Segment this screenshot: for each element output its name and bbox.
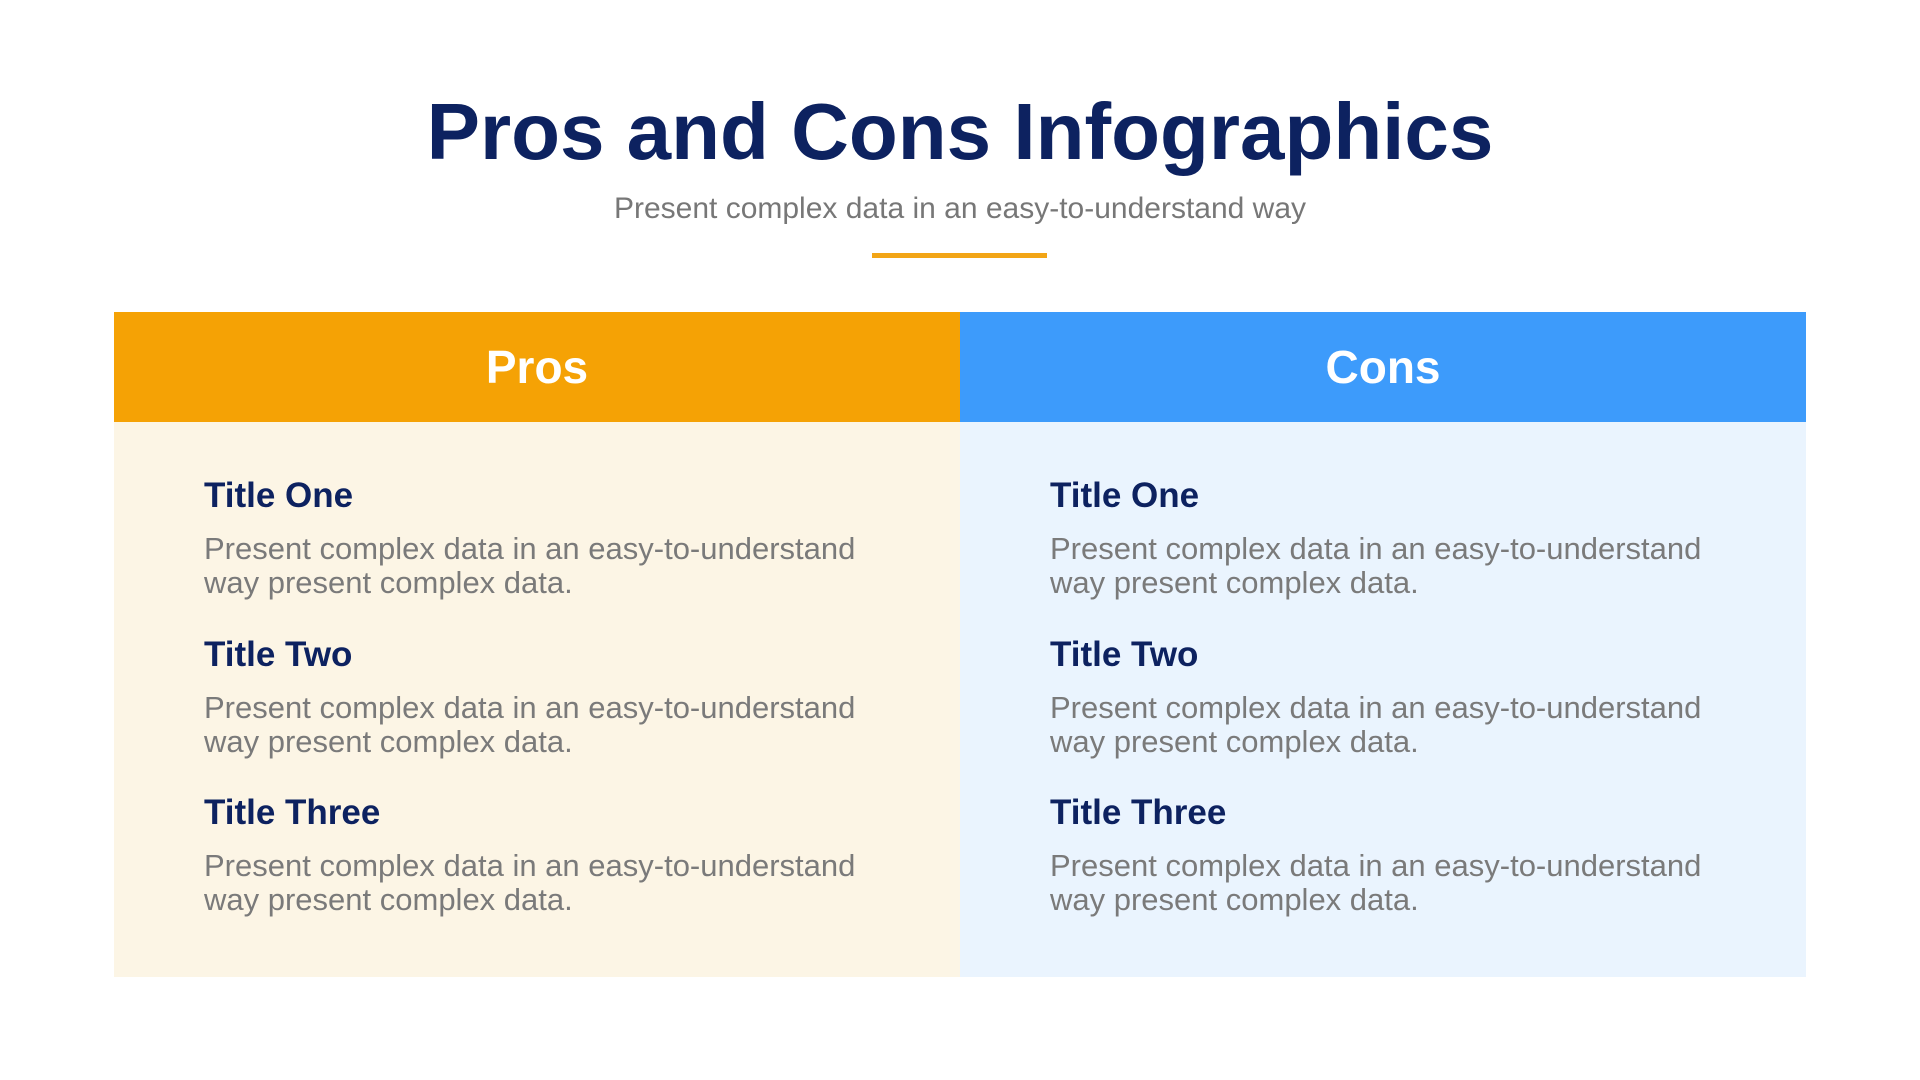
panel: cons — [960, 312, 1806, 977]
pros item two: Present complex data in an easy-to-understand — [204, 690, 855, 725]
pros item one: Title One — [204, 476, 353, 515]
pros item three: way present complex data. — [204, 882, 573, 917]
cons item three: way present complex data. — [1050, 882, 1419, 917]
pros item three — [204, 793, 855, 917]
title: Pros and Cons Infographics — [427, 87, 1493, 176]
panel: pros — [114, 312, 960, 977]
orange underline — [872, 253, 1047, 258]
cons item two: Title Two — [1050, 635, 1198, 674]
pros item two — [204, 635, 855, 759]
cons item two: Present complex data in an easy-to-understand — [1050, 690, 1701, 725]
pros item one: Present complex data in an easy-to-understand — [204, 531, 855, 566]
pros item one — [204, 476, 855, 600]
pros header — [114, 312, 960, 422]
cons item one — [1050, 476, 1701, 600]
cons header: Cons — [1326, 341, 1440, 393]
cons item three — [1050, 793, 1701, 917]
pros item two: way present complex data. — [204, 724, 573, 759]
pros item one: way present complex data. — [204, 565, 573, 600]
cons item three: Title Three — [1050, 793, 1226, 832]
cons item three: Present complex data in an easy-to-understand — [1050, 848, 1701, 883]
cons item one: way present complex data. — [1050, 565, 1419, 600]
subtitle: Present complex data in an easy-to-understand way — [614, 192, 1306, 225]
cons item two — [1050, 635, 1701, 759]
cons item one: Present complex data in an easy-to-understand — [1050, 531, 1701, 566]
cons item two: way present complex data. — [1050, 724, 1419, 759]
cons item one: Title One — [1050, 476, 1199, 515]
cons header — [960, 312, 1806, 422]
pros item three: Present complex data in an easy-to-understand — [204, 848, 855, 883]
pros item three: Title Three — [204, 793, 380, 832]
pros header: Pros — [486, 341, 588, 393]
pros item two: Title Two — [204, 635, 352, 674]
